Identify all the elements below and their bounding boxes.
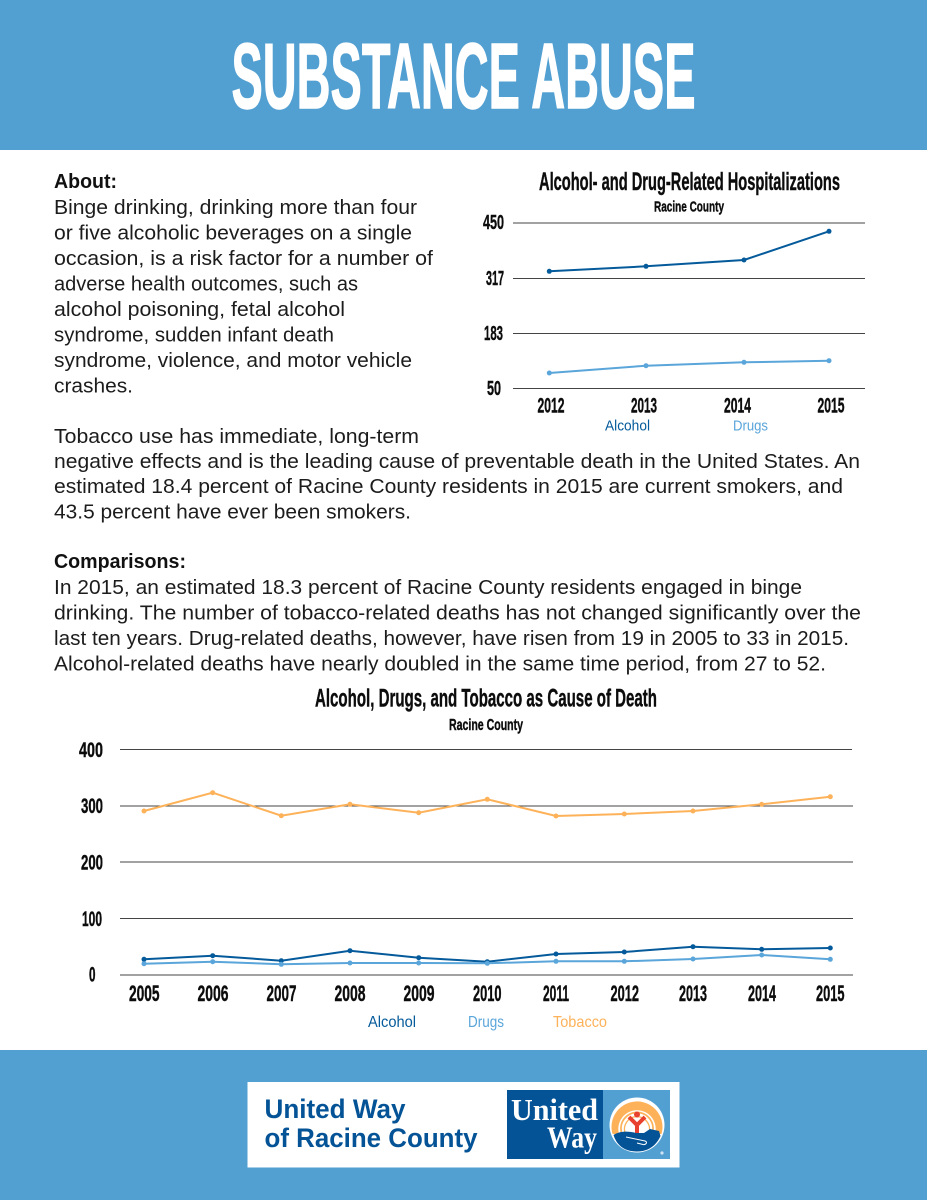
y axis labels: 100: [82, 908, 102, 931]
text block: about: crashes.: [54, 376, 133, 398]
legend: [368, 1014, 607, 1031]
x axis labels: 2006: [198, 981, 228, 1006]
header band: [0, 0, 927, 150]
text block: about: syndrome, sudden infant death: [54, 324, 334, 346]
legend: [605, 418, 768, 434]
line: drugs: [142, 952, 833, 967]
x axis labels: 2012: [538, 394, 564, 418]
logo panel: [248, 1082, 680, 1168]
text block: about: 43.5 percent have ever been smokers.: [54, 502, 411, 524]
x axis labels: 2012: [610, 981, 639, 1006]
chart subtitle: Racine County: [654, 198, 724, 216]
text block: comparisons: Alcohol-related deaths have nearly doubled in the same time period, from 27 to 52.: [54, 654, 826, 676]
text block: comparisons: [54, 551, 861, 676]
x axis labels: 2011: [543, 981, 569, 1006]
text block: about: occasion, is a risk factor for a number of: [54, 248, 433, 270]
line: drugs: [547, 358, 832, 376]
x axis labels: 2015: [816, 981, 844, 1006]
chart subtitle: Racine County: [449, 717, 523, 734]
text block: about: estimated 18.4 percent of Racine County residents in 2015 are current smokers, and: [54, 476, 843, 498]
y axis labels: [483, 212, 504, 400]
organisation name: of Racine County: [264, 1123, 478, 1153]
y axis labels: 183: [484, 323, 503, 345]
chart title: Alcohol, Drugs, and Tobacco as Cause of Death: [315, 684, 657, 712]
x axis labels: 2014: [724, 394, 751, 418]
text block: about: Tobacco use has immediate, long-term: [54, 426, 419, 448]
organisation name: United Way: [264, 1094, 406, 1124]
y axis labels: 317: [486, 268, 504, 290]
legend: Drugs: [733, 418, 768, 434]
x axis labels: 2013: [679, 981, 707, 1006]
y axis labels: 0: [89, 964, 96, 986]
organisation name: [264, 1094, 478, 1153]
legend: Drugs: [468, 1014, 504, 1031]
y axis labels: [79, 739, 103, 986]
line: alcohol: [142, 944, 833, 964]
text block: comparisons: drinking. The number of tobacco-related deaths has not changed significantly over the: [54, 602, 861, 624]
text block: comparisons: last ten years. Drug-related deaths, however, have risen from 19 in 2005 to 33 in 2015.: [54, 628, 849, 650]
x axis labels: [538, 394, 845, 418]
y axis labels: 50: [487, 378, 501, 400]
x axis labels: [129, 981, 844, 1006]
x axis labels: 2015: [818, 394, 845, 418]
x axis labels: 2008: [334, 981, 366, 1006]
legend: Alcohol: [605, 418, 650, 434]
chart: hospitalizations: [483, 168, 865, 434]
legend: Tobacco: [553, 1014, 607, 1031]
logo background: [507, 1090, 670, 1159]
text block: about: or five alcoholic beverages on a single: [54, 222, 412, 244]
text block: about: About:: [54, 171, 117, 193]
y axis labels: 200: [81, 852, 103, 874]
y axis labels: 450: [483, 212, 504, 234]
text block: about: negative effects and is the leading cause of preventable death in the United States. An: [54, 451, 860, 473]
logo wordmark: United: [511, 1092, 598, 1127]
logo wordmark: [511, 1092, 598, 1154]
legend: Alcohol: [368, 1014, 416, 1031]
x axis labels: 2005: [129, 981, 160, 1006]
text block: comparisons: In 2015, an estimated 18.3 percent of Racine County residents engaged in binge: [54, 577, 802, 599]
text block: about: syndrome, violence, and motor vehicle: [54, 350, 412, 372]
text block: comparisons: Comparisons:: [54, 551, 186, 573]
y axis labels: 400: [79, 739, 103, 762]
x axis labels: 2013: [631, 394, 657, 418]
x axis labels: 2014: [748, 981, 776, 1006]
line: alcohol: [547, 229, 832, 274]
x axis labels: 2007: [266, 981, 296, 1006]
x axis labels: 2010: [473, 981, 502, 1006]
text block: about: Binge drinking, drinking more than four: [54, 197, 417, 219]
icon: rainbow, person and hand: [610, 1098, 664, 1155]
text block: about: adverse health outcomes, such as: [54, 274, 358, 296]
logo wordmark: Way: [547, 1120, 597, 1154]
chart: cause of death: [79, 684, 853, 1031]
footer band: [0, 1050, 927, 1200]
text block: about: alcohol poisoning, fetal alcohol: [54, 299, 345, 321]
y axis labels: 300: [81, 795, 103, 818]
text block: about: [54, 171, 860, 524]
line: tobacco: [142, 790, 833, 818]
x axis labels: 2009: [404, 981, 434, 1006]
